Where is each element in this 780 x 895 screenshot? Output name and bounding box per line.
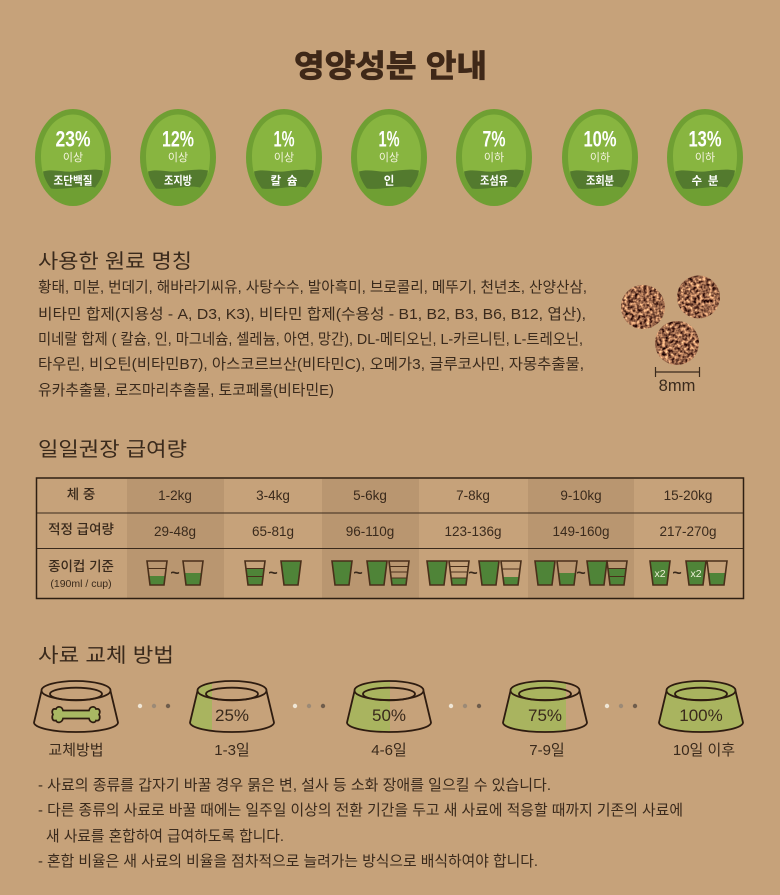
row: recommended amount: 149-160g — [552, 524, 610, 539]
badge: crude ash: 이하 — [590, 150, 610, 164]
cups: 15-20kg — [650, 561, 727, 585]
cups: 5-6kg: ~ — [353, 565, 363, 582]
badge: crude fat: 12% — [162, 126, 194, 152]
badge: moisture: 13% — [688, 126, 722, 152]
label: 1-3 days: 1-3일 — [214, 742, 250, 759]
text block: transition notes: - 혼합 비율은 새 사료의 비율을 점차적으로 늘려가는 방식으로 배식하여야 합니다. — [38, 853, 538, 870]
badge: crude fiber: 이하 — [484, 150, 504, 164]
row: recommended amount — [48, 522, 717, 539]
row: body weight: 5-6kg — [353, 488, 387, 503]
badge: crude fat: 조지방 — [164, 174, 192, 188]
text block: transition notes: - 다른 종류의 사료로 바꿀 때에는 일주일 이상의 전환 기간을 두고 새 사료에 적응할 때까지 기존의 사료에 — [38, 802, 683, 819]
label: 4-6 days: 4-6일 — [371, 742, 407, 759]
badge: calcium — [246, 109, 322, 206]
cups: 7-8kg: ~ — [468, 565, 478, 582]
dots — [138, 704, 170, 708]
row: paper cup: (190ml / cup) — [50, 578, 112, 590]
badge: calcium: 이상 — [274, 151, 294, 164]
bowl: 25%: 25% — [215, 706, 249, 725]
text block: transition notes: 새 사료를 혼합하여 급여하도록 합니다. — [46, 828, 284, 845]
cups: 3-4kg — [245, 561, 301, 585]
badge: crude ash: 10% — [584, 126, 616, 152]
text block: ingredients list: 비타민 합제(지용성 - A, D3, K3), 비타민 합제(수용성 - B1, B2, B3, B6, B12, 엽산), — [38, 306, 586, 323]
badge: crude ash — [562, 109, 638, 206]
cups: 9-10kg — [535, 561, 627, 585]
cups: 15-20kg: x2 — [690, 568, 702, 580]
text block: transition notes: - 사료의 종류를 갑자기 바꿀 경우 묽은 변, 설사 등 소화 장애를 일으킬 수 있습니다. — [38, 777, 551, 794]
row: body weight: 7-8kg — [456, 488, 490, 503]
text block: ingredients list: 미네랄 합제 ( 칼슘, 인, 마그네슘, 셀레늄, 아연, 망간), DL-메티오닌, L-카르니틴, L-트레오닌, — [38, 331, 583, 348]
row: recommended amount: 65-81g — [252, 524, 294, 539]
badge: crude fiber: 7% — [482, 126, 506, 152]
row: body weight: 3-4kg — [256, 488, 290, 503]
badge: calcium: 1% — [274, 126, 294, 152]
badge: phosphorus: 인 — [384, 174, 394, 188]
bowl: 100% — [659, 681, 743, 732]
dots — [449, 704, 481, 708]
heading: ingredients: 사용한 원료 명칭 — [38, 250, 192, 273]
cups: 7-8kg — [427, 561, 521, 585]
bowl: 25% — [190, 681, 274, 732]
badge: moisture: 이하 — [695, 150, 715, 164]
illustration: kibble with size scale — [621, 276, 720, 395]
bowl: 50%: 50% — [372, 706, 406, 725]
text block: ingredients list — [38, 278, 587, 399]
badge: crude protein: 조단백질 — [54, 174, 92, 188]
row: recommended amount: 123-136g — [444, 524, 502, 539]
badge: phosphorus — [351, 109, 427, 206]
label: 7-9 days: 7-9일 — [529, 742, 565, 759]
bowl: 100%: 100% — [679, 706, 723, 725]
cups: 1-2kg: ~ — [170, 565, 180, 582]
badge: phosphorus: 1% — [378, 126, 400, 152]
row: body weight: 1-2kg — [158, 488, 192, 503]
badge: crude fiber: 조섬유 — [480, 174, 508, 188]
dots — [605, 704, 637, 708]
bowl: 50% — [347, 681, 431, 732]
badge: moisture: 수 분 — [692, 174, 719, 188]
row: recommended amount: 217-270g — [659, 524, 717, 539]
badge: crude fat — [140, 109, 216, 206]
label: after 10 days: 10일 이후 — [673, 742, 735, 759]
panel: feeding table — [36, 478, 744, 598]
cups: 5-6kg — [332, 561, 409, 585]
panel: nutrient badges — [35, 109, 743, 206]
illustration: kibble with size scale: 8mm — [659, 377, 695, 395]
heading: daily feeding: 일일권장 급여량 — [38, 438, 187, 461]
row: paper cup — [48, 559, 727, 590]
bowl: 75% — [503, 681, 587, 732]
text block: transition notes — [38, 777, 683, 870]
cups: 15-20kg: ~ — [672, 565, 682, 582]
badge: crude ash: 조회분 — [586, 174, 614, 188]
cups: 9-10kg: ~ — [576, 565, 586, 582]
row: recommended amount: 29-48g — [154, 524, 196, 539]
badge: crude protein: 이상 — [63, 151, 83, 164]
badge: phosphorus: 이상 — [379, 151, 399, 164]
row: body weight — [67, 487, 712, 503]
row: recommended amount: 96-110g — [346, 524, 394, 539]
badge: moisture — [667, 109, 743, 206]
cups: 15-20kg: x2 — [654, 568, 666, 580]
panel: transition steps — [34, 681, 743, 759]
dots — [293, 704, 325, 708]
cups: 3-4kg: ~ — [268, 565, 278, 582]
badge: crude fiber — [456, 109, 532, 206]
heading: food transition: 사료 교체 방법 — [38, 644, 174, 667]
badge: crude protein: 23% — [56, 126, 90, 152]
label: method: 교체방법 — [48, 742, 104, 759]
row: body weight: 체 중 — [67, 487, 95, 502]
row: body weight: 15-20kg — [664, 488, 712, 503]
cups: 1-2kg — [147, 561, 203, 585]
row: body weight: 9-10kg — [560, 488, 602, 503]
text block: ingredients list: 타우린, 비오틴(비타민B7), 아스코르브산(비타민C), 오메가3, 글루코사민, 자몽추출물, — [38, 356, 584, 373]
row: paper cup: 종이컵 기준 — [48, 559, 114, 574]
badge: calcium: 칼 슘 — [270, 174, 298, 188]
row: recommended amount: 적정 급여량 — [48, 522, 114, 537]
text block: ingredients list: 황태, 미분, 번데기, 해바라기씨유, 사탕수수, 발아흑미, 브로콜리, 메뚜기, 천년초, 산양산삼, — [38, 278, 587, 296]
badge: crude fat: 이상 — [168, 151, 188, 164]
bowl: 75%: 75% — [528, 706, 562, 725]
badge: crude protein — [35, 109, 111, 206]
bowl: bone icon — [34, 681, 118, 732]
title: 영양성분 안내 — [294, 49, 487, 84]
text block: ingredients list: 유카추출물, 로즈마리추출물, 토코페롤(비타민E) — [38, 382, 334, 399]
